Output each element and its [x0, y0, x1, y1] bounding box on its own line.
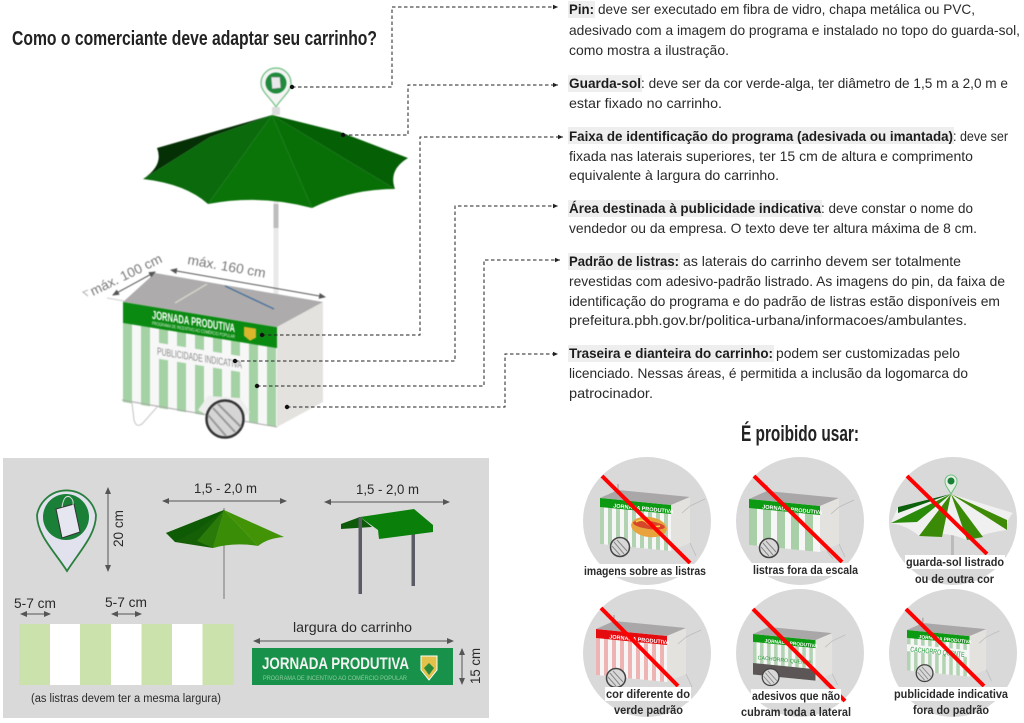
- program banner: JORNADA PRODUTIVA: [262, 654, 409, 673]
- dimension: width: [171, 252, 325, 297]
- wheel: [198, 396, 250, 438]
- text block: Traseira e dianteira: licenciado. Nessas áreas, é permitida a inclusão da logomarca do: [569, 365, 968, 381]
- dimension: awning width: 1,5 - 2,0 m: [356, 481, 419, 497]
- panel: striped umbrella: [889, 457, 1017, 586]
- program banner: [123, 302, 277, 348]
- cart lid lines: [175, 284, 207, 303]
- panel: wrong color: JORNADA PRODUTIVA: [609, 634, 670, 646]
- label: verde padrão: [614, 705, 683, 717]
- cart side: [277, 302, 323, 427]
- stripe pattern: [19, 624, 234, 685]
- label: adesivos que não: [752, 691, 840, 703]
- text block: Traseira e dianteira: [568, 345, 968, 401]
- striped umbrella: [891, 475, 1013, 555]
- text block: Faixa de identificação: fixada nas laterais superiores, ter 15 cm de altura e comprimento: [569, 148, 973, 164]
- panel: stripes out of scale: [736, 457, 864, 585]
- text block: Padrão de listras: as laterais do carrinho devem ser totalmente: [683, 253, 961, 269]
- text block: Guarda-sol: Guarda-sol: [569, 75, 641, 91]
- publicity text: PUBLICIDADE INDICATIVA: [157, 346, 243, 371]
- label: ou de outra cor: [915, 574, 994, 586]
- heading: prohibited: É proibido usar:: [741, 421, 859, 446]
- program banner: PROGRAMA DE INCENTIVO AO COMÉRCIO POPULAR: [263, 673, 407, 682]
- panel: specifications: [3, 458, 489, 718]
- dimension: cart width: largura do carrinho: [293, 619, 412, 635]
- text block: Faixa de identificação: : deve ser: [953, 128, 1008, 144]
- label: [905, 555, 1005, 586]
- label: publicidade indicativa: [894, 689, 1009, 701]
- text block: Pin: deve ser executado em fibra de vidro, chapa metálica ou PVC,: [598, 1, 975, 17]
- label: [605, 687, 691, 717]
- stripe note: (as listras devem ter a mesma largura): [31, 693, 221, 705]
- panel: out-of-pattern publicity: CACHORRO QUENTE: [910, 647, 965, 659]
- callout connectors: [233, 7, 563, 409]
- text block: Traseira e dianteira: Traseira e dianteira do carrinho:: [569, 345, 773, 361]
- title: Como o comerciante deve adaptar seu carrinho?: [12, 28, 377, 50]
- label: imagens sobre as listras: [584, 566, 706, 578]
- icon: pin on top of umbrella: [261, 68, 291, 115]
- dimension: depth: máx. 100 cm: [88, 251, 164, 299]
- awning diagram: [341, 509, 433, 594]
- panel: partial stickers: CACHORRO QUENTE: [757, 655, 812, 667]
- text block: Pin: Pin:: [569, 1, 594, 17]
- dimension: umbrella diameter: 1,5 - 2,0 m: [194, 480, 257, 496]
- panel: images over stripes: JORNADA PRODUTIVA: [613, 503, 674, 515]
- text block: Área de publicidade: [568, 200, 977, 236]
- label: cor diferente do: [606, 689, 690, 701]
- text block: Traseira e dianteira: podem ser customizadas pelo: [776, 345, 960, 361]
- program banner: JORNADA PRODUTIVA: [152, 308, 235, 335]
- text block: Pin: adesivado com a imagem do programa e instalado no topo do guarda-sol,: [569, 22, 1020, 38]
- dimension: width: máx. 160 cm: [186, 252, 267, 281]
- text block: Guarda-sol: estar fixado no carrinho.: [569, 95, 722, 111]
- text block: Área de publicidade: Área destinada à publicidade indicativa: [569, 200, 821, 216]
- text block: Padrão de listras: Padrão de listras:: [569, 253, 679, 269]
- cart rear handle: [107, 273, 155, 301]
- program banner: PROGRAMA DE INCENTIVO AO COMÉRCIO POPULAR: [152, 320, 235, 340]
- panel: wrong color: [583, 589, 711, 717]
- program banner: [252, 648, 453, 685]
- text block: Área de publicidade: vendedor ou da empresa. O texto deve ter altura máxima de 8 cm.: [569, 220, 977, 236]
- text block: Área de publicidade: : deve constar o nome do: [821, 200, 973, 216]
- umbrella: [143, 115, 408, 310]
- cart top: [123, 273, 323, 327]
- label: guarda-sol listrado: [906, 557, 1004, 569]
- panel: out-of-pattern publicity: [889, 589, 1017, 717]
- label: fora do padrão: [913, 705, 989, 717]
- text block: Guarda-sol: : deve ser da cor verde-alga, ter diâmetro de 1,5 m a 2,0 m e: [641, 75, 1008, 91]
- text block: Padrão de listras: revestidas com adesivo-padrão listrado. As imagens do pin, da faixa de: [569, 273, 1005, 289]
- dimension: awning width: [325, 481, 449, 502]
- cart legs: [132, 403, 158, 425]
- text block: Faixa de identificação: Faixa de identificação do programa (adesivada ou imantada): [569, 128, 953, 144]
- panel: partial stickers: JORNADA PRODUTIVA: [764, 638, 818, 650]
- dimension: pin height: 20 cm: [110, 510, 126, 547]
- text block: Padrão de listras: prefeitura.pbh.gov.br/politica-urbana/informacoes/ambulantes.: [569, 312, 967, 328]
- dimension: stripe width: 5-7 cm: [105, 594, 147, 610]
- text block: Faixa de identificação: equivalente à largura do carrinho.: [569, 167, 779, 183]
- panel: out-of-pattern publicity: JORNADA PRODUTIVA: [918, 634, 972, 646]
- label: cubram toda a lateral: [741, 707, 851, 719]
- umbrella diagram: [166, 508, 284, 599]
- label: [893, 687, 1009, 717]
- panel: stripes out of scale: JORNADA PRODUTIVA: [762, 504, 823, 516]
- cart front with stripes: [123, 302, 277, 427]
- text block: Pin: como mostra a ilustração.: [569, 42, 729, 58]
- dimension: stripe width: [14, 594, 147, 614]
- icon: large pin: [37, 490, 96, 571]
- text block: Guarda-sol: [568, 75, 1008, 111]
- dimension: banner height: 15 cm: [467, 648, 483, 684]
- text block: Faixa de identificação: [568, 127, 1008, 183]
- label: [741, 689, 851, 719]
- dimension: pin height: [108, 488, 126, 571]
- dimension: stripe width: 5-7 cm: [14, 595, 56, 611]
- panel: cart illustration: [83, 68, 408, 438]
- text block: Padrão de listras: [568, 253, 1005, 328]
- text block: Traseira e dianteira: patrocinador.: [569, 385, 653, 401]
- text block: Pin: [568, 1, 1020, 58]
- text block: Padrão de listras: identificação do programa e do padrão de listras estão disponíveis em: [569, 293, 1000, 309]
- label: listras fora da escala: [753, 565, 859, 577]
- dimension: umbrella diameter: [163, 480, 286, 501]
- panel: images over stripes: [583, 457, 711, 585]
- panel: partial stickers: [736, 589, 864, 719]
- icon: hot dog: [630, 515, 668, 539]
